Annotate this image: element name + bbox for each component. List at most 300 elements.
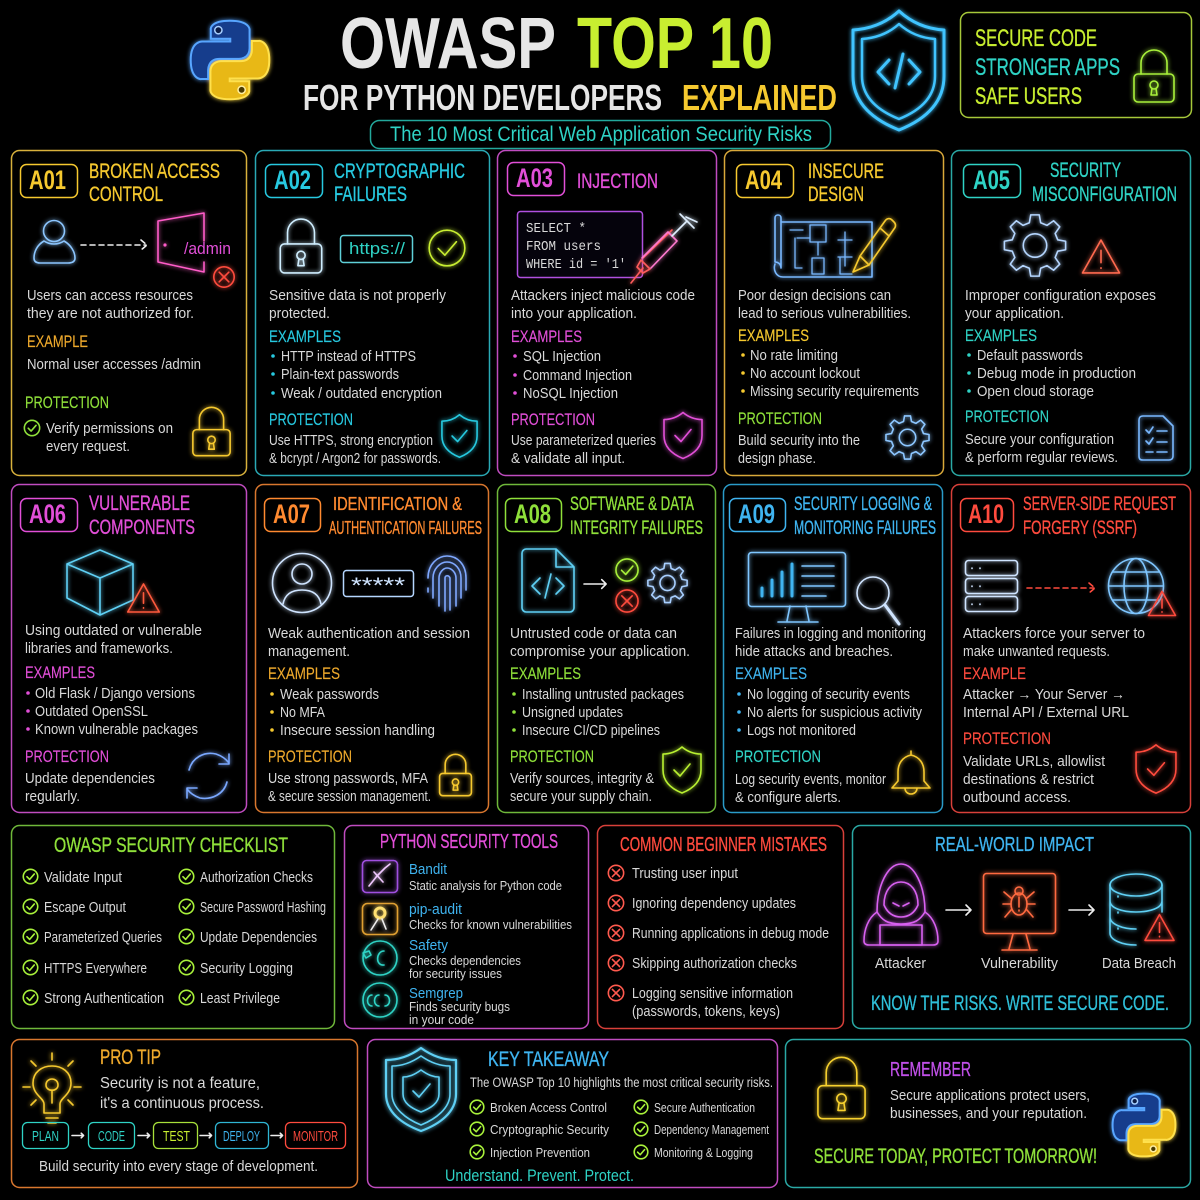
panel: key takeaway xyxy=(368,1040,778,1188)
examples: No logging of security events xyxy=(747,687,910,703)
icon: code file xyxy=(522,549,574,612)
example xyxy=(963,665,1129,721)
description xyxy=(963,626,1145,660)
examples: Missing security requirements xyxy=(750,384,919,400)
code box: FROM users xyxy=(526,239,601,255)
panel: remember xyxy=(786,1040,1190,1188)
example: EXAMPLE xyxy=(27,333,88,351)
protection: Build security into the xyxy=(738,433,860,449)
tool: bandit: Bandit xyxy=(409,861,448,878)
mistake list: Logging sensitive information xyxy=(632,986,793,1002)
checklist column 1: HTTPS Everywhere xyxy=(44,961,147,977)
examples: Logs not monitored xyxy=(747,723,856,739)
description: Failures in logging and monitoring xyxy=(735,626,926,642)
panel: A07 identification and authentication failures xyxy=(256,484,488,812)
protection: PROTECTION xyxy=(25,394,109,412)
icon: pip-audit xyxy=(362,904,398,934)
protection: Use parameterized queries xyxy=(511,433,656,449)
heading xyxy=(1032,159,1177,206)
examples xyxy=(25,664,198,738)
checklist column 2: Least Privilege xyxy=(200,991,280,1007)
examples: No account lockout xyxy=(750,366,860,382)
protection: & perform regular reviews. xyxy=(965,450,1118,466)
badge: A08: A08 xyxy=(514,499,551,529)
https box xyxy=(340,236,412,262)
icon: fingerprint xyxy=(428,556,466,611)
panel: pro tip xyxy=(12,1040,358,1188)
description: your application. xyxy=(965,306,1064,322)
icon: lock xyxy=(440,754,471,796)
arrow xyxy=(1069,905,1094,915)
checklist column 2 xyxy=(200,870,326,1007)
pipeline steps: MONITOR xyxy=(293,1129,338,1145)
panel: A01 broken access control xyxy=(12,150,246,476)
description: Attackers force your server to xyxy=(963,626,1145,642)
icon: bell xyxy=(892,751,930,794)
heading: FORGERY (SSRF) xyxy=(1023,518,1137,539)
examples: Weak / outdated encryption xyxy=(281,386,442,402)
examples: EXAMPLES xyxy=(511,328,582,346)
panel: A09 security logging and monitoring failures xyxy=(724,484,942,812)
example: EXAMPLE xyxy=(963,665,1026,683)
icon: magnifier xyxy=(857,577,899,624)
icon: shield xyxy=(386,1048,456,1131)
message: businesses, and your reputation. xyxy=(890,1105,1087,1122)
heading: INTEGRITY FAILURES xyxy=(570,518,703,539)
panel: A06 vulnerable components xyxy=(12,484,246,812)
tool: pip-audit xyxy=(409,901,572,932)
icon: safety xyxy=(363,941,397,975)
description: hide attacks and breaches. xyxy=(735,644,893,660)
description: make unwanted requests. xyxy=(963,644,1110,660)
examples xyxy=(965,327,1136,400)
takeaway list: Cryptographic Security xyxy=(490,1122,609,1137)
heading xyxy=(794,494,936,539)
checklist column 2: Secure Password Hashing xyxy=(200,900,326,916)
message: Secure applications protect users, xyxy=(890,1087,1090,1104)
protection: every request. xyxy=(46,439,130,455)
examples: HTTP instead of HTTPS xyxy=(281,349,416,365)
examples: EXAMPLES xyxy=(25,664,95,682)
panel: python security tools xyxy=(344,826,588,1028)
protection xyxy=(965,408,1118,466)
caption: Build security into every stage of development. xyxy=(39,1158,318,1175)
badge: A10: A10 xyxy=(968,499,1004,529)
title: TOP 10 xyxy=(577,4,773,84)
checklist column 1: Validate Input xyxy=(44,870,122,886)
description xyxy=(510,626,690,660)
description: Sensitive data is not properly xyxy=(269,288,447,304)
description: lead to serious vulnerabilities. xyxy=(738,306,911,322)
icon: globe xyxy=(1108,558,1164,614)
examples: EXAMPLES xyxy=(735,665,807,683)
tool: safety: Safety xyxy=(409,937,448,954)
heading xyxy=(89,492,195,539)
examples: EXAMPLES xyxy=(269,328,341,346)
cross icons xyxy=(608,865,624,1001)
examples: Old Flask / Django versions xyxy=(35,686,195,702)
description: Weak authentication and session xyxy=(268,626,470,642)
heading xyxy=(89,160,220,206)
title: EXPLAINED xyxy=(682,77,837,118)
description xyxy=(965,288,1156,322)
heading: COMMON BEGINNER MISTAKES xyxy=(620,834,827,856)
protection: PROTECTION xyxy=(735,748,821,766)
panel: real-world impact xyxy=(852,826,1190,1028)
takeaway list xyxy=(490,1100,769,1160)
panel: OWASP security checklist xyxy=(12,826,334,1028)
description: protected. xyxy=(269,306,330,322)
examples: Insecure CI/CD pipelines xyxy=(522,723,660,739)
protection: design phase. xyxy=(738,451,816,467)
icon: user xyxy=(34,220,75,263)
panel: common beginner mistakes xyxy=(598,826,844,1028)
tool: pip-audit: Checks for known vulnerabilities xyxy=(409,917,572,932)
icon: lock xyxy=(280,219,322,273)
panel: A05 security misconfiguration xyxy=(952,150,1190,476)
labels xyxy=(875,955,1176,972)
description: compromise your application. xyxy=(510,644,690,660)
subtitle pill: The 10 Most Critical Web Application Security Risks xyxy=(390,123,812,146)
icon: warning xyxy=(1145,915,1174,940)
tip text: Security is not a feature, xyxy=(100,1075,260,1092)
protection: PROTECTION xyxy=(268,748,352,766)
icon: lock xyxy=(818,1057,865,1119)
takeaway list: Secure Authentication xyxy=(654,1100,755,1115)
callout: secure code xyxy=(960,12,1192,118)
label: admin path: /admin xyxy=(184,239,231,258)
description xyxy=(268,626,470,660)
check icons xyxy=(23,869,194,1005)
protection: Secure your configuration xyxy=(965,432,1114,448)
description xyxy=(25,623,202,657)
protection xyxy=(738,410,860,467)
badge: A03: A03 xyxy=(516,163,553,193)
protection: PROTECTION xyxy=(269,411,353,429)
callout: secure code: SAFE USERS xyxy=(975,83,1082,110)
icon: semgrep xyxy=(363,983,397,1017)
checklist column 1: Strong Authentication xyxy=(44,991,164,1007)
heading: REAL-WORLD IMPACT xyxy=(935,834,1094,856)
mistake list: Trusting user input xyxy=(632,866,738,882)
icon: shield with code xyxy=(853,11,944,130)
heading xyxy=(1023,494,1176,539)
takeaway list: Broken Access Control xyxy=(490,1100,607,1115)
icon: refresh xyxy=(187,753,229,798)
heading: INJECTION xyxy=(577,170,658,193)
examples: EXAMPLES xyxy=(268,665,340,683)
examples: Unsigned updates xyxy=(522,705,623,721)
panel: A04 insecure design xyxy=(724,150,944,476)
checklist column 1 xyxy=(44,870,164,1007)
description: libraries and frameworks. xyxy=(25,641,173,657)
checklist column 2: Authorization Checks xyxy=(200,870,313,886)
badge: A06: A06 xyxy=(29,499,66,529)
takeaway list: Monitoring & Logging xyxy=(654,1145,753,1160)
icon: document xyxy=(1139,416,1173,460)
icon: cross xyxy=(616,590,638,612)
examples: EXAMPLES xyxy=(738,327,809,345)
protection: Validate URLs, allowlist xyxy=(963,754,1105,770)
heading: MONITORING FAILURES xyxy=(794,518,936,539)
protection xyxy=(25,748,155,805)
protection: & bcrypt / Argon2 for passwords. xyxy=(269,451,441,467)
protection xyxy=(269,411,441,467)
icon: check xyxy=(429,230,465,266)
description xyxy=(27,288,194,322)
tool: semgrep xyxy=(409,985,510,1027)
examples: Debug mode in production xyxy=(977,366,1136,382)
description: Poor design decisions can xyxy=(738,288,891,304)
description: Untrusted code or data can xyxy=(510,626,677,642)
arrow xyxy=(584,580,606,588)
protection: & configure alerts. xyxy=(735,790,841,806)
tool: bandit: Static analysis for Python code xyxy=(409,878,562,893)
examples xyxy=(268,665,435,739)
tool: semgrep: Semgrep xyxy=(409,985,463,1002)
icon: shield xyxy=(1136,745,1176,793)
examples: Command Injection xyxy=(523,368,632,384)
heading xyxy=(334,160,465,206)
takeaway list: Injection Prevention xyxy=(490,1145,590,1160)
heading: PYTHON SECURITY TOOLS xyxy=(380,831,558,853)
protection: Update dependencies xyxy=(25,771,155,787)
protection xyxy=(510,748,654,805)
icon: lock xyxy=(193,407,230,456)
icon: python logo xyxy=(191,21,269,99)
protection xyxy=(268,748,431,805)
badge: A02: A02 xyxy=(274,165,311,195)
icon: pencil xyxy=(853,219,896,272)
protection: Use strong passwords, MFA xyxy=(268,771,428,787)
tool: safety xyxy=(409,937,521,981)
examples xyxy=(738,327,919,400)
heading: AUTHENTICATION FAILURES xyxy=(329,518,482,538)
protection: secure your supply chain. xyxy=(510,789,652,805)
examples: No alerts for suspicious activity xyxy=(747,705,923,721)
heading: IDENTIFICATION & xyxy=(333,494,462,514)
heading: COMPONENTS xyxy=(89,516,195,539)
checklist column 1: Escape Output xyxy=(44,900,126,916)
icon: python logo xyxy=(1113,1094,1175,1156)
title: OWASP xyxy=(340,4,556,84)
icon: denied xyxy=(214,267,234,287)
callout: secure code: SECURE CODE xyxy=(975,25,1097,52)
icon: gear xyxy=(648,563,687,603)
heading xyxy=(329,494,482,538)
icon: light bulb xyxy=(23,1053,81,1123)
description: Using outdated or vulnerable xyxy=(25,623,202,639)
heading: PRO TIP xyxy=(100,1046,161,1069)
code box: WHERE id = '1' xyxy=(526,257,626,273)
heading: VULNERABLE xyxy=(89,492,190,515)
message xyxy=(890,1087,1090,1122)
takeaway list: Dependency Management xyxy=(654,1122,769,1137)
badge: A04: A04 xyxy=(745,165,782,195)
heading xyxy=(570,494,703,539)
tool: bandit xyxy=(409,861,562,893)
examples: No MFA xyxy=(280,705,325,721)
checklist column 2: Update Dependencies xyxy=(200,930,317,946)
example xyxy=(27,333,201,373)
code box: SELECT * xyxy=(526,221,586,237)
protection: PROTECTION xyxy=(963,730,1051,748)
protection xyxy=(735,748,886,806)
protection: PROTECTION xyxy=(25,748,109,766)
description xyxy=(511,288,695,322)
pipeline steps: CODE xyxy=(98,1129,125,1145)
examples xyxy=(269,328,442,402)
icon: attacker xyxy=(864,864,938,945)
panel: A10 server-side request forgery xyxy=(952,484,1190,812)
example: Internal API / External URL xyxy=(963,705,1129,721)
icon: infected monitor xyxy=(984,874,1056,950)
icon: shield xyxy=(663,747,701,793)
protection: Log security events, monitor xyxy=(735,772,886,788)
protection: Verify sources, integrity & xyxy=(510,771,654,787)
icon: gear xyxy=(1004,215,1066,276)
icon: monitor chart xyxy=(748,552,846,622)
description: they are not authorized for. xyxy=(27,306,194,322)
description: Users can access resources xyxy=(27,288,193,304)
icon: check xyxy=(616,559,638,581)
mistake list xyxy=(632,866,829,1020)
check icons xyxy=(470,1100,648,1159)
heading: SECURITY LOGGING & xyxy=(794,494,932,515)
icon: shield xyxy=(664,412,702,458)
heading: CONTROL xyxy=(89,183,163,206)
protection xyxy=(963,730,1105,806)
tool: semgrep: Finds security bugs xyxy=(409,999,510,1014)
protection: PROTECTION xyxy=(965,408,1049,426)
example: Normal user accesses /admin xyxy=(27,357,201,373)
icon: door xyxy=(158,213,204,272)
heading: SECURITY xyxy=(1050,159,1121,182)
protection: & secure session management. xyxy=(268,789,431,805)
examples: EXAMPLES xyxy=(510,665,581,683)
labels: Data Breach xyxy=(1102,955,1176,972)
arrow xyxy=(1027,583,1095,593)
heading: FAILURES xyxy=(334,183,407,206)
pipeline steps: PLAN xyxy=(32,1129,59,1145)
protection xyxy=(24,394,173,455)
examples: No rate limiting xyxy=(750,348,838,364)
description xyxy=(269,288,447,322)
icon: shield xyxy=(442,415,477,457)
callout: secure code: STRONGER APPS xyxy=(975,54,1120,81)
pipeline steps: DEPLOY xyxy=(223,1129,260,1145)
icon: syringe xyxy=(631,214,697,283)
icon: servers xyxy=(966,560,1018,612)
description xyxy=(738,288,911,322)
panel: A03 injection xyxy=(498,150,716,476)
description: Attackers inject malicious code xyxy=(511,288,695,304)
heading: INSECURE xyxy=(808,160,884,183)
badge: A07: A07 xyxy=(273,499,310,529)
icon: user circle xyxy=(272,554,332,612)
checklist column 2: Security Logging xyxy=(200,961,293,977)
password box xyxy=(344,570,414,598)
examples: NoSQL Injection xyxy=(523,386,618,402)
pipeline steps xyxy=(22,1122,346,1148)
description: management. xyxy=(268,644,350,660)
examples xyxy=(735,665,923,739)
summary: The OWASP Top 10 highlights the most critical security risks. xyxy=(470,1075,773,1090)
title xyxy=(303,4,837,118)
tool: safety: Checks dependencies xyxy=(409,953,521,968)
protection: regularly. xyxy=(25,789,80,805)
arrow xyxy=(81,240,147,250)
heading: OWASP SECURITY CHECKLIST xyxy=(54,834,288,857)
examples xyxy=(510,665,684,739)
https box: https:// xyxy=(349,239,405,258)
heading: REMEMBER xyxy=(890,1059,971,1081)
icon: bandit xyxy=(362,860,398,892)
protection: outbound access. xyxy=(963,790,1071,806)
examples: Plain-text passwords xyxy=(281,367,399,383)
protection: Verify permissions on xyxy=(46,421,173,437)
mistake list: Ignoring dependency updates xyxy=(632,896,796,912)
heading: BROKEN ACCESS xyxy=(89,160,220,183)
examples: Installing untrusted packages xyxy=(522,687,684,703)
icon: warning xyxy=(1148,592,1176,616)
examples: Weak passwords xyxy=(280,687,379,703)
heading xyxy=(808,160,884,206)
password box: ***** xyxy=(351,573,406,598)
description xyxy=(735,626,926,660)
examples: Known vulnerable packages xyxy=(35,722,198,738)
example: Attacker → Your Server → xyxy=(963,687,1125,703)
title: FOR PYTHON DEVELOPERS xyxy=(303,77,662,118)
tip text: it's a continuous process. xyxy=(100,1095,264,1112)
heading: SOFTWARE & DATA xyxy=(570,494,694,515)
badge: A05: A05 xyxy=(973,165,1010,195)
icon: gear xyxy=(886,416,929,459)
mistake list: (passwords, tokens, keys) xyxy=(632,1004,780,1020)
tool: safety: for security issues xyxy=(409,966,502,981)
description: into your application. xyxy=(511,306,637,322)
mistake list: Running applications in debug mode xyxy=(632,926,829,942)
icon: database xyxy=(1110,874,1162,945)
heading: KEY TAKEAWAY xyxy=(488,1048,609,1071)
tool: semgrep: in your code xyxy=(409,1012,474,1027)
tip text xyxy=(100,1075,264,1112)
examples: Insecure session handling xyxy=(280,723,435,739)
examples: SQL Injection xyxy=(523,349,601,365)
panel: A02 cryptographic failures xyxy=(256,150,490,476)
panel: A08 software and data integrity failures xyxy=(498,484,716,812)
protection: PROTECTION xyxy=(510,748,594,766)
examples: Open cloud storage xyxy=(977,384,1094,400)
protection: destinations & restrict xyxy=(963,772,1094,788)
badge: A01: A01 xyxy=(29,165,66,195)
mistake list: Skipping authorization checks xyxy=(632,956,797,972)
protection: Use HTTPS, strong encryption xyxy=(269,433,433,449)
protection: PROTECTION xyxy=(738,410,822,428)
code box xyxy=(518,212,642,278)
badge: A09: A09 xyxy=(738,499,775,529)
icon: warning xyxy=(128,584,159,612)
labels: Attacker xyxy=(875,955,926,972)
examples xyxy=(511,328,632,402)
protection: PROTECTION xyxy=(511,411,595,429)
heading: CRYPTOGRAPHIC xyxy=(334,160,465,183)
pipeline steps: TEST xyxy=(163,1129,190,1145)
checklist column 1: Parameterized Queries xyxy=(44,930,162,946)
arrow xyxy=(946,905,971,915)
protection: & validate all input. xyxy=(511,451,625,467)
tool: pip-audit: pip-audit xyxy=(409,901,463,918)
